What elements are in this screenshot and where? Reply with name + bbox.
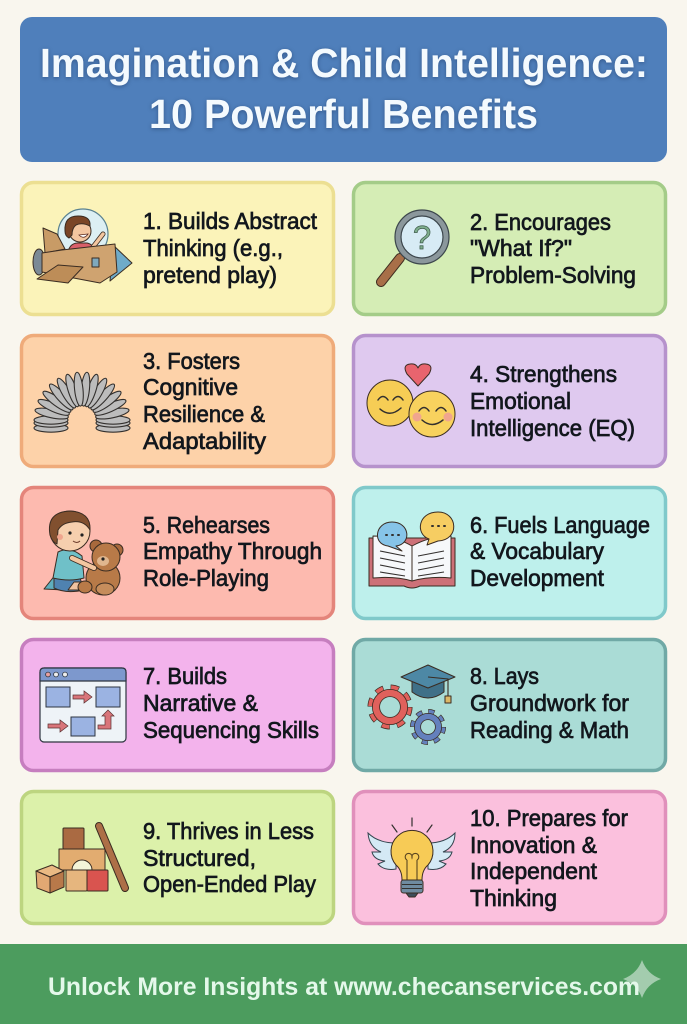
icon: open book with speech bubbles bbox=[369, 512, 455, 588]
text: benefit 4: 4. Strengthens bbox=[470, 361, 617, 387]
panel: benefit 1 abstract thinking bbox=[22, 182, 334, 314]
text: benefit 3 bbox=[143, 348, 267, 454]
text: benefit 8: Groundwork for bbox=[470, 690, 629, 716]
text: benefit 8: Reading & Math bbox=[470, 717, 629, 743]
text: benefit 1: pretend play) bbox=[143, 262, 277, 288]
icon: storyboard window with arrows bbox=[40, 668, 126, 742]
text: benefit 10 bbox=[470, 805, 628, 911]
text: benefit 9: Structured, bbox=[143, 845, 256, 871]
text: benefit 6 bbox=[470, 512, 650, 591]
text: benefit 9 bbox=[143, 818, 316, 897]
icon: sparkle bbox=[623, 960, 661, 998]
text: benefit 10: Innovation & bbox=[470, 832, 597, 858]
text: benefit 1: 1. Builds Abstract bbox=[143, 208, 318, 234]
text: benefit 1: Thinking (e.g., bbox=[143, 235, 283, 261]
panel: benefit 9 open-ended play bbox=[22, 792, 334, 924]
text: benefit 6: 6. Fuels Language bbox=[470, 512, 650, 538]
icon: winged light bulb bbox=[368, 818, 455, 897]
title banner bbox=[20, 17, 667, 162]
text: benefit 7: 7. Builds bbox=[143, 663, 227, 689]
title banner: 10 Powerful Benefits bbox=[149, 91, 538, 137]
text: benefit 2: "What If?" bbox=[470, 235, 572, 261]
text: benefit 7: Narrative & bbox=[143, 690, 258, 716]
text: benefit 5: Role-Playing bbox=[143, 565, 269, 591]
text: benefit 1 bbox=[143, 208, 318, 288]
panel: benefit 6 language bbox=[354, 488, 666, 618]
text: benefit 7: Sequencing Skills bbox=[143, 717, 319, 743]
text: benefit 3: Resilience & bbox=[143, 401, 265, 427]
text: benefit 5: Empathy Through bbox=[143, 538, 322, 564]
text: benefit 9: Open-Ended Play bbox=[143, 871, 316, 897]
text: benefit 2: Problem-Solving bbox=[470, 262, 636, 288]
icon: slinky spring bbox=[34, 372, 130, 432]
icon: magnifying glass with question mark: ? bbox=[413, 219, 431, 256]
title banner: Imagination & Child Intelligence: bbox=[40, 40, 648, 86]
text: benefit 2: 2. Encourages bbox=[470, 209, 611, 235]
icon: cardboard rocket with child bbox=[33, 209, 132, 283]
text: benefit 8: 8. Lays bbox=[470, 663, 539, 689]
footer band bbox=[0, 944, 687, 1024]
icon: child with teddy bear bbox=[44, 511, 123, 595]
text: benefit 7 bbox=[143, 663, 319, 743]
panel: benefit 3 resilience bbox=[22, 336, 334, 466]
panel: benefit 2 what if bbox=[354, 182, 666, 314]
panel: benefit 10 innovation bbox=[354, 792, 666, 924]
text: benefit 10: Independent bbox=[470, 858, 598, 884]
footer text: Unlock More Insights at www.checanservices.com bbox=[48, 973, 640, 1001]
text: benefit 3: Cognitive bbox=[143, 374, 238, 400]
text: benefit 3: 3. Fosters bbox=[143, 348, 240, 374]
panel: benefit 4 emotional intelligence bbox=[354, 336, 666, 466]
icon: wooden blocks bbox=[36, 826, 125, 893]
text: benefit 4: Intelligence (EQ) bbox=[470, 415, 635, 441]
panel: benefit 7 narrative bbox=[22, 640, 334, 770]
text: benefit 5 bbox=[143, 512, 322, 591]
text: benefit 5: 5. Rehearses bbox=[143, 512, 270, 538]
text: benefit 3: Adaptability bbox=[143, 428, 267, 454]
text: benefit 9: 9. Thrives in Less bbox=[143, 818, 314, 844]
text: benefit 10: 10. Prepares for bbox=[470, 805, 628, 831]
text: benefit 4: Emotional bbox=[470, 388, 571, 414]
icon: graduation cap and gears bbox=[371, 665, 455, 742]
text: benefit 8 bbox=[470, 663, 629, 743]
panel: benefit 8 reading and math bbox=[354, 640, 666, 770]
text: benefit 4 bbox=[470, 361, 635, 441]
text: benefit 6: & Vocabulary bbox=[470, 538, 604, 564]
text: benefit 10: Thinking bbox=[470, 885, 557, 911]
text: benefit 6: Development bbox=[470, 565, 605, 591]
panel: benefit 5 empathy bbox=[22, 488, 334, 618]
icon: magnifying glass with question mark bbox=[381, 210, 449, 282]
icon: two smiling faces with heart bbox=[367, 364, 455, 437]
text: benefit 2 bbox=[470, 209, 636, 288]
